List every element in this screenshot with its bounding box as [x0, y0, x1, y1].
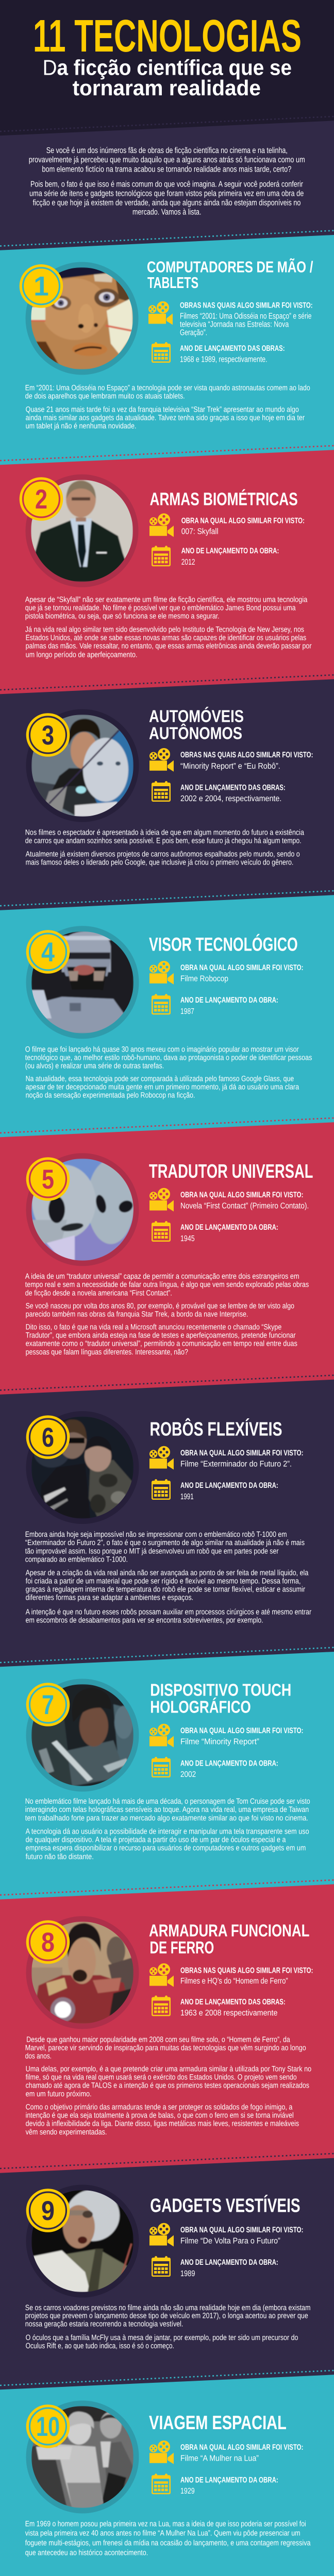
badge: number 2: 2 [35, 484, 47, 515]
fact: obras: televisiva “Jornada nas Estrelas: Nova [180, 320, 289, 329]
fact: ano: ANO DE LANÇAMENTO DA OBRA: [180, 1223, 278, 1232]
panel: item 5 tradutor universal [0, 1122, 334, 1395]
body text: de dois aparelhos que lembram muito os atuais tablets. [25, 392, 185, 400]
body text [25, 2035, 311, 2137]
badge: number 6 [26, 1415, 70, 1459]
fact: obras [180, 1966, 313, 1986]
body text: um longo período de aperfeiçoamento. [26, 650, 137, 659]
fact: obra [181, 517, 305, 536]
fact: obra [180, 1191, 309, 1210]
heading: AUTOMÓVEIS [149, 706, 244, 726]
fact: ano: 2002 e 2004, respectivamente. [180, 794, 281, 803]
badge: number 7 [26, 1683, 70, 1726]
icon: calendar [152, 342, 171, 363]
body text: (ou alvos) e realizar uma série de outras tarefas. [25, 1061, 164, 1070]
badge: number 10 [26, 2404, 70, 2448]
body text [25, 1530, 311, 1624]
photo: james bond in ring [26, 474, 138, 587]
fact: obra [180, 2443, 303, 2463]
body text [25, 828, 305, 867]
body text: vêm sendo experimentadas. [26, 2128, 107, 2137]
photo: minority report and i robot in ring [26, 709, 139, 822]
fact: obras [180, 301, 313, 337]
subtitle [43, 56, 292, 100]
body text: nossa geração estaria recorrendo a tecnologia vestível. [25, 2320, 183, 2329]
body text: diferentes formas para se adaptar a ambientes e espaços. [26, 1594, 193, 1602]
icon: film camera [149, 1724, 174, 1748]
heading [147, 258, 313, 292]
icon: film camera [149, 1446, 174, 1469]
fact: ano: ANO DE LANÇAMENTO DA OBRA: [180, 2258, 278, 2267]
badge: number 8: 8 [41, 1927, 55, 1958]
fact: obras: Geração”. [180, 328, 207, 337]
photo: minority report in ring [26, 1679, 139, 1792]
body text: de qualquer dispositivo. A tela é projetada a partir do uso de um par de óculos especial e a [26, 1835, 286, 1844]
panel: introduction [0, 116, 334, 250]
heading: DE FERRO [149, 1939, 214, 1958]
fact: ano [180, 783, 286, 803]
body text: futuro não tão distante. [26, 1852, 94, 1861]
body text [25, 2303, 311, 2350]
body text: em escombros de desabamentos para ver se encontra sobreviventes, por exemplo. [26, 1616, 263, 1624]
badge: number 5: 5 [42, 1164, 54, 1195]
heading: ROBÔS FLEXÍVEIS [149, 1418, 282, 1440]
fact: ano: 1929 [180, 2487, 195, 2496]
fact: ano: ANO DE LANÇAMENTO DAS OBRAS: [180, 783, 286, 792]
panel: item 1 computadores de mão [0, 235, 334, 465]
fact: obra [180, 1726, 303, 1747]
body text [25, 383, 310, 430]
icon: film camera [149, 1188, 174, 1212]
body text [25, 595, 312, 659]
photo: aliens in ring [26, 1153, 139, 1266]
fact: obra [180, 963, 303, 984]
body text: comparado ao emblemático T-1000. [25, 1555, 128, 1564]
badge: number 1: 1 [34, 272, 49, 302]
icon: calendar [152, 994, 171, 1014]
fact: ano [180, 2476, 278, 2496]
fact: obras [180, 751, 313, 771]
badge: number 9: 9 [41, 2196, 55, 2226]
fact: ano: ANO DE LANÇAMENTO DA OBRA: [180, 1481, 278, 1490]
photo: iron man in ring [26, 1916, 139, 2029]
icon: calendar [152, 1757, 171, 1777]
fact: ano: 1987 [180, 1007, 194, 1016]
badge: number 6: 6 [42, 1422, 54, 1453]
fact: obra: Filme “A Mulher na Lua” [180, 2454, 259, 2463]
fact: ano: ANO DE LANÇAMENTO DA OBRA: [180, 2476, 278, 2484]
body text: Embora ainda hoje seja impossível não se impressionar com o emblemático robô T-1000 em [25, 1530, 287, 1539]
fact: ano [180, 1997, 286, 2018]
fact: ano [180, 1481, 278, 1501]
fact: ano [180, 344, 285, 364]
fact: ano [180, 996, 278, 1016]
photo: a mulher na lua in ring [26, 2401, 139, 2513]
body text [25, 1272, 309, 1357]
fact: obra [180, 2226, 303, 2246]
fact: obra: Novela “First Contact” (Primeiro Contato). [180, 1201, 309, 1210]
icon: calendar [152, 1221, 171, 1242]
intro text [29, 146, 305, 216]
fact: ano [180, 1759, 278, 1779]
heading: AUTÔNOMOS [149, 723, 242, 743]
badge: number 8 [26, 1920, 70, 1964]
badge: number 10: 10 [36, 2412, 60, 2442]
icon: film camera [149, 513, 174, 537]
fact: obra: 007: Skyfall [181, 528, 219, 536]
fact: obras: “Minority Report” e “Eu Robô”. [180, 762, 280, 771]
body text: em um futuro próximo. [26, 2090, 92, 2098]
body text: dos anos. [25, 2052, 52, 2060]
icon: film camera [148, 301, 173, 325]
fact: obra: Filme Robocop [180, 975, 228, 984]
heading [150, 1681, 291, 1717]
body text: que antecedeu ao histórico acontecimento. [25, 2548, 148, 2557]
fact: obra: Filme “De Volta Para o Futuro” [180, 2237, 280, 2246]
panel: item 7 dispositivo touch holográfico [0, 1652, 334, 1900]
badge: number 3 [26, 713, 70, 757]
fact: ano: 1945 [180, 1234, 195, 1243]
body text [25, 1797, 310, 1861]
badge: number 9 [26, 2189, 70, 2232]
icon: calendar [152, 546, 171, 566]
body text [25, 1045, 312, 1100]
badge: number 4 [26, 930, 70, 974]
panel: item 2 armas biométricas [0, 450, 334, 694]
fact: ano: ANO DE LANÇAMENTO DAS OBRAS: [180, 1997, 286, 2006]
fact: obra [180, 1449, 303, 1469]
fact: ano: ANO DE LANÇAMENTO DA OBRA: [181, 547, 279, 555]
heading [149, 1921, 309, 1958]
photo: robocop in ring [26, 926, 139, 1039]
badge: number 3: 3 [42, 720, 54, 751]
icon: calendar [152, 781, 171, 802]
icon: calendar [152, 1479, 171, 1500]
fact: obra: Filme “Minority Report” [180, 1738, 259, 1747]
body text: de ficção desde a novela americana “First Contact”. [25, 1289, 172, 1297]
icon: film camera [149, 748, 174, 772]
fact: ano: ANO DE LANÇAMENTO DA OBRA: [180, 1759, 278, 1768]
panel: item 3 automóveis autônomos [0, 679, 334, 910]
heading: TABLETS [147, 274, 198, 292]
panel: title header [0, 0, 334, 136]
intro text: mercado. Vamos à lista. [132, 208, 201, 216]
badge: number 5 [26, 1157, 70, 1201]
body text: Oculus Rift e, ao que tudo indica, isso é só o começo. [26, 2342, 174, 2350]
icon: calendar [152, 2473, 171, 2494]
fact: obras: Filmes e HQ’s do “Homem de Ferro” [180, 1977, 288, 1986]
body text: parecido também nas obras da franquia Star Trek, a bordo da nave Interprise. [26, 1310, 248, 1318]
panel: item 10 viagem espacial [0, 2375, 334, 2576]
heading: DISPOSITIVO TOUCH [150, 1681, 291, 1700]
body text: noção da sensação experimentada pelo Robocop na ficção. [26, 1091, 195, 1100]
heading [149, 706, 244, 743]
panel: item 8 armadura funcional de ferro [0, 1884, 334, 2173]
fact: ano: ANO DE LANÇAMENTO DA OBRA: [180, 996, 278, 1005]
fact: ano [181, 547, 279, 567]
icon: calendar [152, 2256, 171, 2277]
body text: pistola biométrica, ou seja, que só funciona se ele mesmo a segurar. [25, 612, 220, 620]
icon: film camera [149, 2441, 174, 2464]
fact: ano: 1991 [180, 1493, 194, 1501]
body text: um tablet já não é nenhuma novidade. [26, 421, 136, 430]
photo: doc brown in ring [26, 2184, 139, 2298]
badge: number 2 [20, 477, 63, 521]
icon: film camera [149, 961, 174, 985]
subtitle: Da ficção científica que se [43, 56, 292, 80]
badge: number 4: 4 [41, 937, 55, 968]
heading: VIAGEM ESPACIAL [149, 2412, 287, 2434]
body text: Dito isso, o fato é que na vida real a Microsoft anunciou recentemente o chamado “Skype [26, 1323, 281, 1331]
fact: ano: ANO DE LANÇAMENTO DAS OBRAS: [180, 344, 285, 353]
icon: film camera [149, 2223, 174, 2246]
fact: ano: 1963 e 2008 respectivamente [180, 2009, 277, 2018]
photo: 2001 astronaut in ring [26, 262, 138, 375]
body text: tão improvável assim. Isso porque o MIT já desenvolveu um robô que em partes pode ser [25, 1547, 279, 1555]
icon: calendar [152, 1995, 171, 2016]
subtitle: tornaram realidade [72, 76, 261, 100]
badge: number 7: 7 [42, 1690, 54, 1720]
panel: item 4 visor tecnológico [0, 895, 334, 1138]
fact: ano: 1989 [180, 2269, 195, 2278]
icon: film camera [149, 1963, 174, 1987]
badge: number 1 [20, 264, 63, 308]
fact: ano [180, 2258, 278, 2278]
fact: obra: Filme “Exterminador do Futuro 2”. [180, 1460, 292, 1469]
fact: ano: 1968 e 1989, respectivamente. [180, 355, 268, 364]
heading: HOLOGRÁFICO [150, 1698, 251, 1717]
fact: ano [180, 1223, 278, 1243]
panel: item 9 gadgets vestíveis [0, 2158, 334, 2390]
photo: terminator 2 in ring [26, 1411, 139, 1524]
fact: ano: 2002 [180, 1770, 196, 1779]
fact: ano: 2012 [181, 558, 195, 567]
panel: item 6 robôs flexíveis [0, 1380, 334, 1667]
body text: pessoas que falam línguas diferentes. Interessante, não? [26, 1348, 188, 1357]
body text [25, 2519, 311, 2557]
